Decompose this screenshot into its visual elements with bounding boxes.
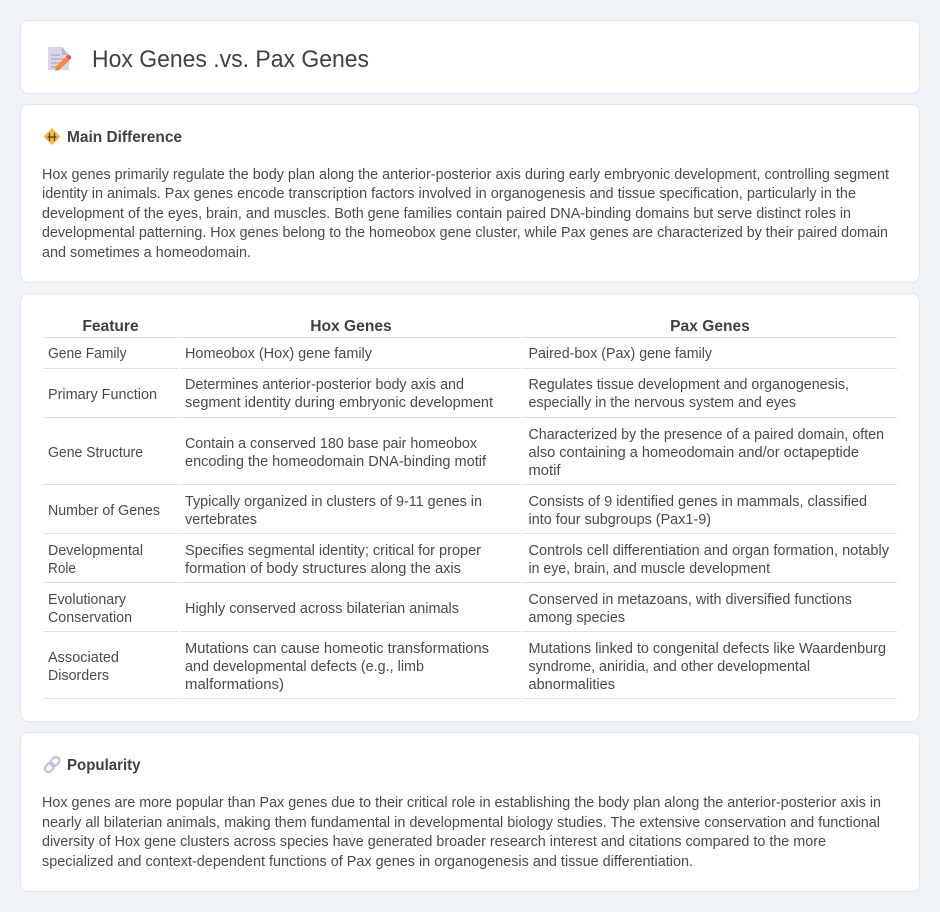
row: number of genes: vertebrates: [185, 512, 257, 528]
row: developmental role: Developmental: [48, 543, 143, 559]
row: associated disorders: Associated: [48, 650, 119, 666]
row: gene family: Paired-box (Pax) gene family: [528, 346, 713, 362]
row: gene family: Homeobox (Hox) gene family: [185, 346, 373, 362]
text block: main difference: development of the eyes, brain, and muscles. Both gene families contain paired DNA-binding domains but serve distinct roles in: [42, 206, 851, 222]
row: primary function: Regulates tissue development and organogenesis,: [528, 377, 849, 393]
row: developmental role: formation of body structures along the axis: [185, 561, 461, 577]
row: evolutionary conservation: Highly conserved across bilaterian animals: [185, 601, 459, 617]
row: gene structure: motif: [528, 463, 561, 479]
row: gene family: Gene Family: [48, 346, 127, 362]
icon: link: [43, 755, 61, 774]
row: gene structure: also containing a homeodomain and/or octapeptide: [528, 445, 859, 461]
text block: main difference: and sometimes a homeodomain.: [42, 245, 251, 261]
row: number of genes: [48, 494, 867, 528]
row: gene family: [48, 346, 713, 362]
row: primary function: Primary Function: [48, 387, 157, 403]
row: gene structure: Gene Structure: [48, 445, 143, 461]
row: number of genes: Typically organized in clusters of 9-11 genes in: [185, 494, 482, 510]
panel: popularity: [20, 732, 920, 892]
text block: main difference: developmental patterning. Hox genes belong to the homeobox gene cluster, while Pax genes are characterized by their paired domain: [42, 225, 888, 241]
row: primary function: segment identity during embryonic development: [185, 395, 493, 411]
panel: title card: [20, 20, 920, 94]
row: associated disorders: Disorders: [48, 668, 109, 684]
row: primary function: [48, 377, 849, 411]
heading: popularity: Popularity: [67, 757, 141, 774]
row: associated disorders: and developmental defects (e.g., limb: [185, 659, 424, 675]
row: evolutionary conservation: Conserved in metazoans, with diversified functions: [528, 592, 852, 608]
row: developmental role: Role: [48, 561, 76, 577]
table header: Hox Genes: [310, 318, 392, 335]
row: developmental role: Specifies segmental identity; critical for proper: [185, 543, 481, 559]
row: evolutionary conservation: Evolutionary: [48, 592, 127, 608]
text block: main difference: identity in animals. Pax genes encode transcription factors involved in organogenesis and tissue specification, particularly in the: [42, 186, 856, 202]
text block: popularity: specialized and context-dependent functions of Pax genes in organogenesis and tissue differentiation.: [42, 854, 693, 870]
text block: popularity: [42, 795, 881, 870]
row: number of genes: Number of Genes: [48, 503, 160, 519]
row: number of genes: into four subgroups (Pax1-9): [528, 512, 711, 528]
table header: Pax Genes: [670, 318, 750, 335]
row: associated disorders: [48, 641, 886, 693]
row: gene structure: Contain a conserved 180 base pair homeobox: [185, 436, 478, 452]
row: associated disorders: abnormalities: [528, 677, 615, 693]
text block: popularity: Hox genes are more popular than Pax genes due to their critical role in establishing the body plan along the anterior-posterior axis in: [42, 795, 881, 811]
row: gene structure: encoding the homeodomain DNA-binding motif: [185, 454, 487, 470]
row: gene structure: Characterized by the presence of a paired domain, often: [528, 427, 884, 443]
row: evolutionary conservation: [48, 592, 852, 626]
row: evolutionary conservation: Conservation: [48, 610, 132, 626]
table header: Feature: [82, 318, 139, 335]
heading: main difference: Main Difference: [67, 129, 182, 146]
row: number of genes: Consists of 9 identified genes in mammals, classified: [528, 494, 867, 510]
text block: main difference: Hox genes primarily regulate the body plan along the anterior-posterior axis during early embryonic development, controlling segment: [42, 167, 889, 183]
text block: popularity: nearly all bilaterian animals, making them fundamental in developmental biology studies. The extensive conservation and functional: [42, 815, 880, 831]
row: associated disorders: malformations): [185, 677, 284, 693]
title: Hox Genes .vs. Pax Genes: [92, 46, 369, 73]
row: gene structure: [48, 427, 884, 479]
row: evolutionary conservation: among species: [528, 610, 625, 626]
row: primary function: Determines anterior-posterior body axis and: [185, 377, 464, 393]
row: developmental role: [48, 543, 890, 577]
icon: diamond sign: [44, 128, 60, 145]
text block: popularity: diversity of Hox gene clusters across species have generated broader research interest and citations compared to the more: [42, 834, 826, 850]
panel: main difference: [20, 104, 920, 282]
row: associated disorders: Mutations linked to congenital defects like Waardenburg: [528, 641, 886, 657]
row: associated disorders: Mutations can cause homeotic transformations: [185, 641, 489, 657]
table header: [82, 318, 750, 335]
panel: comparison table: [20, 294, 920, 722]
row: primary function: especially in the nervous system and eyes: [528, 395, 796, 411]
row: associated disorders: syndrome, aniridia, and other developmental: [528, 659, 810, 675]
row: developmental role: Controls cell differentiation and organ formation, notably: [528, 543, 890, 559]
row: developmental role: in eye, brain, and muscle development: [528, 561, 770, 577]
icon: memo with pencil: [48, 47, 71, 70]
text block: main difference: [42, 167, 889, 261]
